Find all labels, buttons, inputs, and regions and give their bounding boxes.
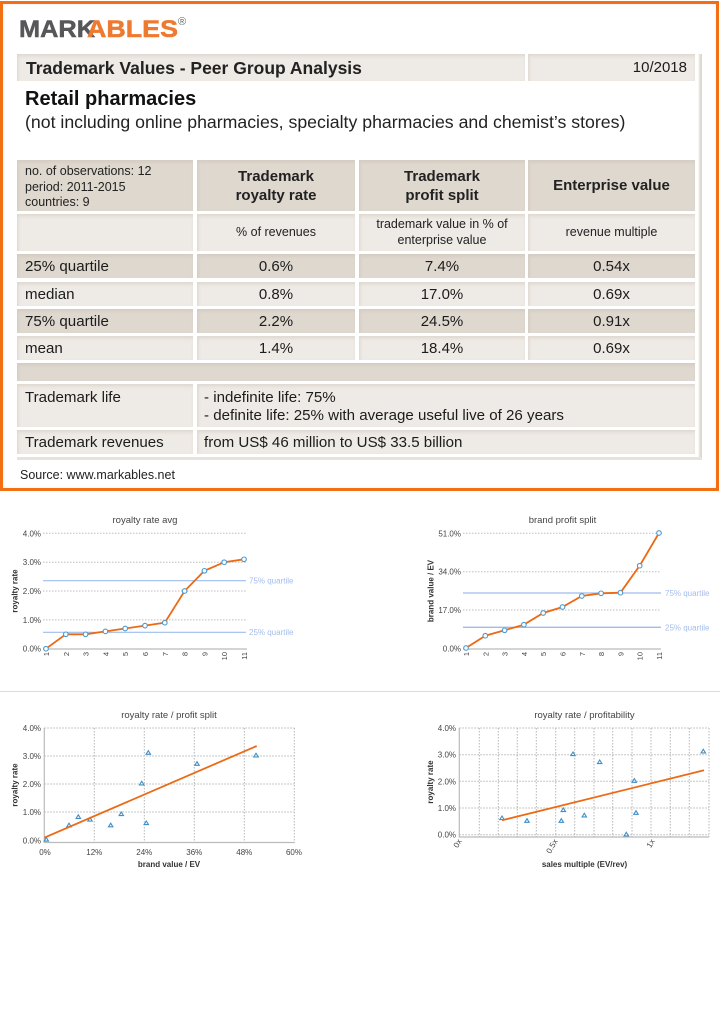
column heading: royalty rate: Trademark [238, 168, 314, 184]
data line [46, 559, 244, 649]
chart: royalty rate avg [10, 515, 294, 660]
subject heading: Retail pharmacies [25, 88, 196, 110]
x axis title: sales multiple (EV/rev) [542, 860, 628, 869]
quartile lines: 25% quartile [249, 628, 294, 637]
quartile lines: 75% quartile [249, 576, 294, 586]
column heading: profit split: Trademark [404, 168, 480, 184]
y axis title: royalty rate [10, 763, 20, 807]
x axis labels: 48% [236, 848, 252, 857]
column heading: royalty rate [197, 160, 355, 211]
title bar: Trademark Values - Peer Group Analysis [26, 58, 362, 78]
trademark revenues text: from US$ 46 million to US$ 33.5 billion [204, 434, 462, 451]
y axis title: royalty rate [426, 760, 435, 804]
y axis labels: 34.0% [438, 568, 461, 577]
y axis labels: 1.0% [438, 804, 456, 813]
trademark life text: - indefinite life: 75% [204, 389, 336, 406]
trademark revenues label [17, 430, 193, 454]
x axis labels: 6 [558, 652, 568, 656]
x axis labels: 2 [62, 652, 71, 656]
x axis labels: 8 [181, 652, 190, 656]
row: median: 17.0% [421, 286, 463, 302]
row: mean: 1.4% [259, 340, 293, 356]
trademark life label [17, 384, 193, 427]
quartile lines [463, 589, 710, 632]
x axis labels: 10 [636, 652, 645, 660]
trend line [44, 746, 257, 838]
sample info cell: countries: 9 [25, 195, 90, 209]
y axis labels [438, 529, 461, 654]
x axis labels [462, 652, 664, 660]
y axis labels: 1.0% [23, 808, 41, 817]
chart: royalty rate / profitability [426, 710, 709, 869]
sample info cell [17, 160, 193, 211]
column heading: enterprise value [528, 160, 695, 211]
y axis labels: 17.0% [438, 606, 461, 615]
y axis labels: 2.0% [23, 587, 41, 596]
x axis labels: 11 [240, 652, 249, 660]
table drop shadow edge [698, 54, 702, 460]
data points [44, 557, 246, 651]
x axis labels [39, 848, 302, 857]
row: 75% quartile: 0.91x [593, 312, 630, 330]
row: 75% quartile: 75% quartile [25, 312, 109, 330]
y axis labels: 4.0% [23, 529, 41, 538]
x axis labels [452, 838, 657, 855]
y axis labels: 1.0% [23, 616, 41, 625]
trend line [502, 770, 704, 820]
x axis labels: 0x [452, 838, 464, 849]
source: Source: www.markables.net [20, 468, 175, 482]
x axis labels: 4 [101, 652, 110, 656]
y axis labels [438, 724, 456, 840]
trademark revenues label: Trademark revenues [25, 434, 164, 451]
y axis labels: 3.0% [23, 752, 41, 761]
x axis labels [42, 652, 249, 660]
x axis labels: 10 [220, 652, 229, 660]
y axis title: royalty rate [10, 569, 20, 613]
x axis labels: 6 [141, 652, 150, 656]
unit: trademark value: enterprise value [398, 232, 486, 246]
y axis labels: 4.0% [23, 724, 41, 733]
horizontal divider [0, 691, 720, 692]
sample info cell: period: 2011-2015 [25, 180, 126, 194]
trademark revenues text [197, 430, 695, 454]
chart: brand profit split [426, 515, 710, 660]
row: median [17, 282, 695, 306]
chart title: brand profit split [529, 515, 597, 526]
y axis title: brand value / EV [426, 559, 436, 622]
chart title: royalty rate avg [113, 515, 177, 526]
unit: revenue multiple: revenue multiple [566, 225, 657, 239]
y axis labels: 2.0% [438, 777, 456, 786]
x axis labels: 60% [286, 848, 302, 857]
date cell [528, 54, 695, 81]
row: 25% quartile [17, 254, 695, 278]
y axis labels [23, 529, 41, 654]
y axis labels: 3.0% [23, 558, 41, 567]
x axis labels: 24% [136, 848, 152, 857]
logo: Markables: MARK [19, 16, 96, 43]
row: mean: 18.4% [421, 340, 463, 356]
x axis labels: 11 [655, 652, 664, 660]
sample info cell: no. of observations: 12 [25, 164, 151, 178]
unit: percent of revenues [197, 214, 355, 251]
x axis labels: 2 [481, 652, 490, 656]
x axis title: brand value / EV [138, 860, 201, 869]
x axis labels: 3 [82, 652, 91, 656]
y axis labels [23, 724, 41, 845]
row: 25% quartile: 7.4% [425, 258, 459, 274]
row: 25% quartile: 0.54x [593, 258, 630, 274]
subject note: (not including online pharmacies, specialty pharmacies and chemist’s stores) [25, 112, 625, 132]
unit row blank cell [17, 214, 193, 251]
y axis labels: 4.0% [438, 724, 456, 733]
x axis labels: 9 [200, 652, 209, 656]
x axis labels: 7 [161, 652, 170, 656]
y axis labels: 0.0% [23, 836, 41, 845]
x axis labels: 0% [39, 848, 51, 857]
blank separator row [17, 363, 695, 381]
chart: royalty rate / profit split [10, 710, 302, 869]
y axis labels: 3.0% [438, 751, 456, 760]
row: median: 0.8% [259, 286, 293, 302]
y axis labels: 0.0% [23, 645, 41, 654]
x axis labels: 12% [86, 848, 102, 857]
column heading: profit split [359, 160, 525, 211]
row: mean: mean [25, 340, 63, 356]
chart title: royalty rate / profitability [534, 710, 635, 721]
x axis labels: 5 [539, 652, 548, 656]
orange frame [0, 1, 719, 491]
row: 75% quartile: 2.2% [259, 312, 293, 330]
title bar [17, 54, 525, 81]
x axis labels: 7 [578, 652, 587, 656]
table bottom edge [17, 457, 702, 460]
logo: Markables: ABLES [87, 16, 178, 43]
trademark life text: - definite life: 25% with average useful live of 26 years [204, 407, 564, 424]
x axis labels: 5 [121, 652, 130, 656]
row: 25% quartile: 0.6% [259, 258, 293, 274]
row: mean: 0.69x [593, 340, 630, 356]
x axis labels: 36% [186, 848, 202, 857]
trademark life label: Trademark life [25, 389, 121, 406]
quartile lines: 75% quartile [665, 589, 710, 598]
x axis labels: 9 [616, 652, 625, 656]
x axis labels: 4 [520, 652, 529, 656]
unit: trademark value: trademark value in % of [376, 217, 508, 231]
row: median: 0.69x [593, 286, 630, 302]
x axis labels: 3 [501, 652, 510, 656]
row: 25% quartile: 25% quartile [25, 258, 109, 274]
quartile lines [43, 576, 294, 637]
x axis labels: 8 [597, 652, 606, 656]
unit: revenue multiple [528, 214, 695, 251]
x axis labels: 1 [462, 652, 471, 656]
y axis labels: 2.0% [23, 780, 41, 789]
data points [500, 749, 706, 836]
unit: percent of revenues: % of revenues [236, 225, 316, 239]
x axis labels: 0.5x [544, 838, 560, 855]
logo: Markables [19, 16, 186, 43]
column heading: enterprise value: Enterprise value [553, 177, 670, 194]
column heading: profit split: profit split [405, 186, 479, 204]
data points [44, 751, 258, 841]
row: 75% quartile [17, 309, 695, 333]
data line [466, 533, 659, 648]
date cell: 10/2018 [633, 59, 687, 76]
x axis labels: 1x [645, 838, 657, 849]
data points [464, 531, 661, 650]
chart title: royalty rate / profit split [121, 710, 217, 721]
quartile lines: 25% quartile [665, 623, 710, 632]
y axis labels: 0.0% [438, 830, 456, 840]
y axis labels: 0.0% [443, 645, 461, 654]
trademark life text [197, 384, 695, 427]
logo: Markables: ® [178, 16, 186, 28]
y axis labels: 51.0% [438, 529, 461, 538]
row: 75% quartile: 24.5% [421, 312, 463, 330]
row: median: median [25, 286, 75, 302]
unit: trademark value [359, 214, 525, 251]
x axis labels: 1 [42, 652, 51, 656]
row: mean [17, 336, 695, 360]
column heading: royalty rate: royalty rate [236, 186, 316, 204]
